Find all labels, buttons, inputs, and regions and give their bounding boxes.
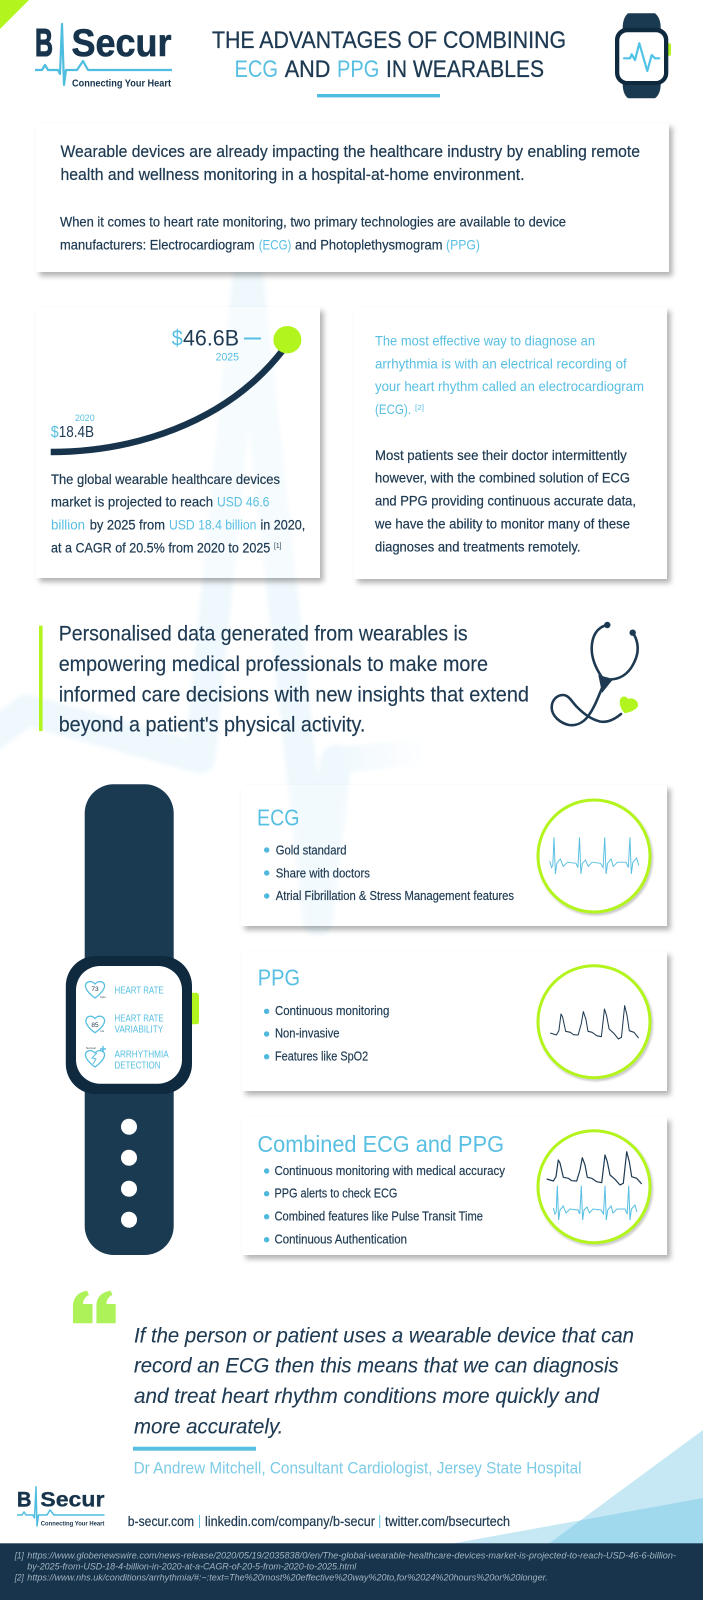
icon: arrhythmia: [85, 1046, 106, 1067]
icon: arrhythmia: Normal: [86, 1046, 96, 1050]
ECG heading: ECG: [257, 805, 300, 831]
footer references bar: by-2025-from-USD-18-4-billion-in-2020-at-a-CAGR-of-20-5-from-2020-to-2025.html: [27, 1561, 357, 1572]
quote divider: [133, 1447, 256, 1451]
quote text: record an ECG then this means that we can diagnosis: [134, 1355, 619, 1378]
ECG bullets: Gold standard: [276, 843, 347, 857]
logo: B-Secur: [35, 22, 172, 90]
market text: billion: [51, 517, 85, 533]
intro body text: (PPG): [446, 236, 480, 252]
footer logo: Secur: [40, 1489, 104, 1512]
title: THE ADVANTAGES OF COMBINING: [212, 27, 566, 54]
callout: personalised data: beyond a patient's physical activity.: [59, 714, 365, 737]
growth curve chart: 46.6B: [183, 326, 239, 351]
intro body text: manufacturers: Electrocardiogram: [60, 236, 255, 252]
diagnosis blue text: [375, 332, 644, 417]
panel: market growth: [36, 308, 326, 585]
market text: in 2020,: [260, 517, 305, 533]
diagnosis dark text: diagnoses and treatments remotely.: [375, 538, 580, 554]
diagnosis blue text: arrhythmia is with an electrical recording of: [375, 355, 627, 371]
combined bullets: [264, 1164, 506, 1247]
icon: heart rate variability: ms: [100, 1029, 104, 1033]
market text: [1]: [274, 543, 282, 550]
watch crown: [191, 993, 199, 1024]
icon: stethoscope: [552, 622, 638, 725]
intro lead text: Wearable devices are already impacting the healthcare industry by enabling remote: [60, 142, 640, 161]
title: IN WEARABLES: [386, 56, 544, 83]
footer links: twitter.com/bsecurtech: [385, 1513, 510, 1529]
icon: heart rate: [85, 982, 106, 999]
title: AND: [285, 56, 330, 83]
watch screen: [76, 966, 182, 1084]
PPG waveform circle: [538, 966, 650, 1078]
growth curve chart: $: [51, 424, 59, 441]
footer references bar: [1]: [14, 1550, 24, 1561]
metric label: heart rate variability: HEART RATE: [114, 1014, 164, 1025]
logo: B-Secur: Secur: [72, 22, 172, 65]
market text: market is projected to reach: [51, 494, 213, 510]
title: ECG: [234, 56, 278, 83]
market text: USD 46.6: [217, 494, 270, 510]
intro body text: [60, 214, 566, 252]
diagnosis dark text: Most patients see their doctor intermittently: [375, 447, 627, 463]
metric label: heart rate: HEART RATE: [114, 985, 164, 996]
diagnosis dark text: we have the ability to monitor many of these: [374, 515, 630, 531]
footer references bar: https://www.nhs.uk/conditions/arrhythmia/#:~:text=The%20most%20effective%20way%20to,for%2024%20hours%20or%20longer.: [27, 1573, 548, 1584]
combined bullets: PPG alerts to check ECG: [274, 1187, 397, 1201]
growth curve chart: 2025: [216, 351, 239, 363]
panel: diagnosis: [354, 307, 667, 579]
market text: USD 18.4 billion: [169, 517, 256, 533]
PPG bullets: Non-invasive: [275, 1027, 340, 1041]
quote text: more accurately.: [134, 1415, 283, 1438]
diagnosis blue text: [2]: [415, 405, 424, 412]
panel: intro: [36, 123, 669, 272]
panel: ECG: [242, 786, 674, 933]
metric label: arrhythmia detection: DETECTION: [114, 1060, 160, 1071]
growth curve chart: $: [172, 326, 183, 351]
corner triangles bottom right: [453, 1430, 703, 1544]
icon: heart rate: bpm: [100, 995, 106, 999]
footer logo: B: [17, 1489, 31, 1512]
metric label: heart rate variability: VARIABILITY: [114, 1025, 163, 1036]
footer links: b-secur.com: [128, 1513, 194, 1529]
intro body text: When it comes to heart rate monitoring, two primary technologies are available to device: [60, 214, 566, 230]
combined waveform circle: [538, 1131, 650, 1243]
callout: personalised data: empowering medical professionals to make more: [59, 653, 488, 676]
diagnosis blue text: (ECG).: [375, 401, 411, 417]
footer references bar: [0, 1543, 703, 1600]
diagnosis dark text: and PPG providing continuous accurate data,: [375, 493, 636, 509]
quote text: If the person or patient uses a wearable device that can: [134, 1325, 634, 1348]
logo: B-Secur: Connecting Your Heart: [72, 78, 171, 90]
PPG heading: PPG: [258, 965, 300, 991]
footer links: [128, 1513, 510, 1529]
icon: heart rate variability: [86, 1016, 105, 1033]
combined bullets: Continuous Authentication: [274, 1233, 407, 1247]
diagnosis dark text: however, with the combined solution of ECG: [375, 470, 630, 486]
combined bullets: Continuous monitoring with medical accuracy: [274, 1164, 506, 1178]
quote text: and treat heart rhythm conditions more quickly and: [134, 1385, 600, 1408]
metric label: arrhythmia detection: ARRHYTHMIA: [114, 1049, 169, 1060]
market text: at a CAGR of 20.5% from 2020 to 2025: [51, 539, 270, 555]
icon: smartwatch: [615, 13, 671, 98]
corner accent triangle: [0, 0, 29, 29]
panel: combined ECG and PPG: [242, 1117, 667, 1255]
growth curve chart: [51, 326, 301, 452]
strap holes: [121, 1119, 137, 1228]
metric label: arrhythmia detection: [114, 1049, 169, 1071]
diagnosis blue text: The most effective way to diagnose an: [375, 332, 595, 348]
PPG bullets: [264, 1004, 389, 1064]
quote text: [134, 1325, 634, 1438]
combined heading: Combined ECG and PPG: [257, 1131, 504, 1157]
footer links: linkedin.com/company/b-secur: [205, 1513, 375, 1529]
quote attribution: Dr Andrew Mitchell, Consultant Cardiologist, Jersey State Hospital: [134, 1458, 582, 1477]
market text: [51, 471, 305, 555]
market text: The global wearable healthcare devices: [51, 471, 280, 487]
ECG bullets: Share with doctors: [276, 866, 370, 880]
title: PPG: [337, 56, 379, 83]
growth curve chart: 18.4B: [59, 424, 94, 441]
market text: by 2025 from: [90, 517, 165, 533]
footer references bar: https://www.globenewswire.com/news-release/2020/05/19/2035838/0/en/The-global-wearable-healthcare-devices-market-is-projected-to-reach-USD-46-6-billion-: [27, 1550, 676, 1561]
watch case: [66, 956, 192, 1094]
diagnosis dark text: [374, 447, 636, 554]
PPG bullets: Features like SpO2: [275, 1050, 368, 1064]
icon: quotation marks: [73, 1291, 116, 1323]
growth curve chart: 2020: [75, 413, 95, 423]
footer references bar: [2]: [14, 1573, 24, 1584]
ECG waveform circle: [538, 800, 650, 912]
panel: PPG: [242, 951, 667, 1091]
ECG bullets: [264, 843, 514, 903]
callout: personalised data: informed care decisions with new insights that extend: [59, 683, 529, 706]
icon: heart rate variability: 85: [91, 1022, 99, 1029]
ECG bullets: Atrial Fibrillation & Stress Management features: [276, 889, 514, 903]
callout: personalised data: [39, 623, 529, 737]
illustration: large smartwatch: [66, 784, 199, 1255]
intro body text: and Photoplethysmogram: [295, 236, 442, 252]
intro body text: (ECG): [259, 236, 291, 252]
intro lead text: health and wellness monitoring in a hospital-at-home environment.: [60, 165, 524, 184]
watch strap: [85, 784, 174, 1255]
metric label: heart rate variability: [114, 1014, 164, 1036]
logo: B-Secur: B: [35, 22, 53, 65]
PPG bullets: Continuous monitoring: [275, 1004, 389, 1018]
footer logo: Connecting Your Heart: [41, 1521, 105, 1528]
title: [212, 27, 566, 97]
icon: heart rate: 73: [91, 986, 99, 993]
footer logo: [17, 1487, 105, 1528]
intro lead text: [60, 142, 640, 184]
combined bullets: Combined features like Pulse Transit Time: [274, 1210, 483, 1224]
diagnosis blue text: your heart rhythm called an electrocardiogram: [375, 378, 644, 394]
callout: personalised data: Personalised data generated from wearables is: [59, 623, 468, 646]
background watermark: ECG trace: [0, 278, 432, 920]
